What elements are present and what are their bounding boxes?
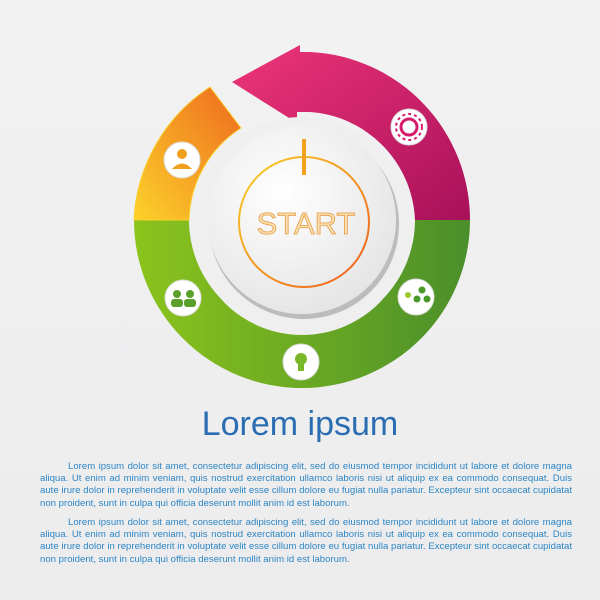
icon: bulb — [283, 344, 319, 380]
icon: team — [398, 279, 434, 315]
paragraph 1: Lorem ipsum dolor sit amet, consectetur adipiscing elit, sed do eiusmod tempor incididunt ut labore et dolore magna aliqua. Ut enim ad minim veniam, quis nostrud exercitation ullamco laboris nisi ut aliquip ex ea commodo consequat. Duis aute irure dolor in reprehenderit in voluptate velit esse cillum dolore eu fugiat nulla pariatur. Excepteur sint occaecat cupidatat non proident, sunt in culpa qui officia deserunt mollit anim id est laborum. — [40, 461, 572, 509]
icon: sun — [391, 109, 427, 145]
inner plate — [193, 117, 411, 335]
paragraph 2: Lorem ipsum dolor sit amet, consectetur adipiscing elit, sed do eiusmod tempor incididunt ut labore et dolore magna aliqua. Ut enim ad minim veniam, quis nostrud exercitation ullamco laboris nisi ut aliquip ex ea commodo consequat. Duis aute irure dolor in reprehenderit in voluptate velit esse cillum dolore eu fugiat nulla pariatur. Excepteur sint occaecat cupidatat non proident, sunt in culpa qui officia deserunt mollit anim id est laborum. — [40, 517, 572, 565]
cycle diagram — [134, 45, 470, 388]
start button: START — [257, 206, 355, 241]
segment: green bottom — [134, 220, 470, 388]
segment: orange — [134, 87, 241, 220]
icon: two people — [165, 280, 201, 316]
icon: person — [164, 142, 200, 178]
segment: pink arrow — [232, 45, 470, 220]
start button — [208, 126, 399, 319]
title: Lorem ipsum — [202, 405, 398, 443]
